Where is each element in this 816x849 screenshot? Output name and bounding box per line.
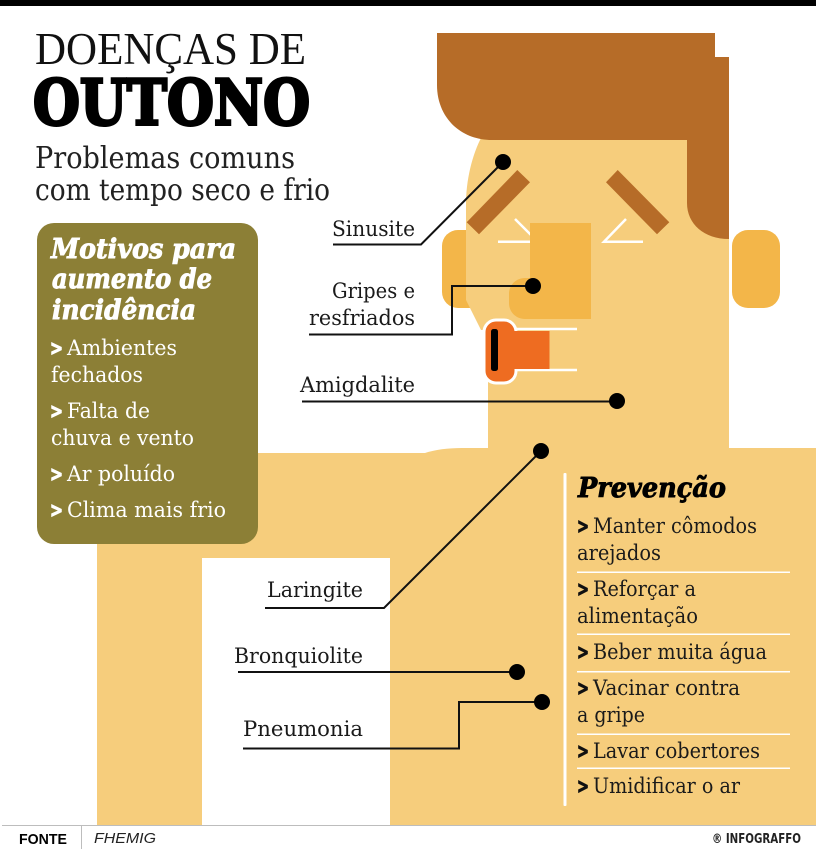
list of prevention tips: Beber muita água xyxy=(593,640,767,664)
callout: amigdalite: Amigdalite xyxy=(299,373,415,397)
list of reasons: fechados xyxy=(51,363,143,387)
panel heading: Prevenção xyxy=(577,473,726,504)
list of reasons: Clima mais frio xyxy=(67,498,226,522)
panel heading xyxy=(50,234,236,326)
nose xyxy=(509,223,591,319)
list of reasons: chuva e vento xyxy=(51,426,194,450)
title: OUTONO xyxy=(33,66,310,140)
callout: gripes e resfriados xyxy=(309,278,541,334)
list of prevention tips: Lavar cobertores xyxy=(593,739,760,763)
list of prevention tips xyxy=(577,514,790,798)
list of reasons: > xyxy=(50,498,63,522)
list of reasons xyxy=(50,336,226,522)
subtitle xyxy=(35,141,330,208)
panel heading: incidência xyxy=(52,295,196,326)
list of reasons: Falta de xyxy=(67,399,150,423)
panel: motivos para aumento de incidência xyxy=(37,223,258,544)
list of prevention tips: Umidificar o ar xyxy=(593,774,741,798)
title xyxy=(33,24,310,140)
callout: bronquiolite xyxy=(234,644,525,680)
callout: bronquiolite: Bronquiolite xyxy=(234,644,363,668)
list of prevention tips: > xyxy=(577,676,589,700)
subtitle: Problemas comuns xyxy=(35,141,295,176)
eyebrow: left xyxy=(467,170,530,234)
subtitle: com tempo seco e frio xyxy=(35,173,330,208)
callout: amigdalite xyxy=(299,373,625,409)
source name: FHEMIG xyxy=(94,830,156,847)
ear: right xyxy=(732,230,780,308)
list of prevention tips: > xyxy=(577,640,589,664)
list of reasons: > xyxy=(50,462,63,486)
list of prevention tips: Reforçar a xyxy=(593,577,696,601)
torso xyxy=(97,448,816,825)
list of prevention tips: > xyxy=(577,514,589,538)
list of prevention tips: a gripe xyxy=(577,703,645,727)
list of reasons: > xyxy=(50,399,63,423)
callout: gripes e resfriados: Gripes e xyxy=(332,279,415,303)
callout: gripes e resfriados: resfriados xyxy=(309,306,415,330)
footer xyxy=(2,825,816,849)
list of reasons: > xyxy=(50,336,63,360)
callout: laringite xyxy=(265,443,549,608)
list of prevention tips: Manter cômodos xyxy=(593,514,757,538)
mouth xyxy=(484,320,577,383)
callout: laringite: Laringite xyxy=(267,578,363,602)
callout: pneumonia xyxy=(243,694,550,748)
list of prevention tips: > xyxy=(577,774,589,798)
hair xyxy=(437,33,729,239)
list of reasons: Ar poluído xyxy=(66,462,175,486)
panel heading: Motivos para xyxy=(50,234,236,265)
panel: prevenção xyxy=(564,473,790,806)
list of reasons: Ambientes xyxy=(66,336,177,360)
title: DOENÇAS DE xyxy=(35,24,306,74)
list of prevention tips: > xyxy=(577,739,589,763)
callout: sinusite xyxy=(332,154,511,244)
list of prevention tips: Vacinar contra xyxy=(592,676,740,700)
ear: left xyxy=(442,230,490,308)
head and neck xyxy=(466,130,729,450)
callout: pneumonia: Pneumonia xyxy=(243,717,363,741)
eye: left xyxy=(498,219,531,242)
list of prevention tips: > xyxy=(577,577,589,601)
list of prevention tips: arejados xyxy=(577,541,661,565)
source label: FONTE xyxy=(19,831,67,848)
list of prevention tips: alimentação xyxy=(577,604,698,628)
eye: right xyxy=(604,219,643,242)
eyebrow: right xyxy=(606,170,669,234)
callout: sinusite: Sinusite xyxy=(332,217,415,241)
panel heading: aumento de xyxy=(52,264,212,295)
